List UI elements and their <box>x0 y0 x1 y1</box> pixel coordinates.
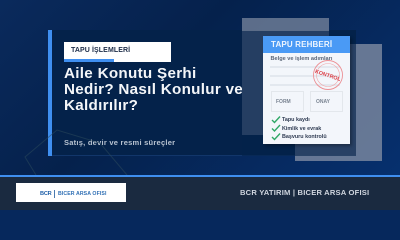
back card left <box>242 18 329 135</box>
title: Aile Konutu Şerhi <box>64 65 197 82</box>
logo name: BICER ARSA OFISI <box>58 190 106 196</box>
check icons <box>272 116 280 140</box>
box: onay: ONAY <box>316 98 330 104</box>
stamp: kontrol <box>313 60 343 90</box>
footer brand text: BCR YATIRIM | BICER ARSA OFISI <box>240 188 369 197</box>
tag text: TAPU İŞLEMLERİ <box>71 47 130 54</box>
card caption: Belge ve işlem adımları <box>270 56 332 62</box>
box: form: FORM <box>276 98 291 104</box>
footer <box>0 175 400 210</box>
check text: Tapu kaydı <box>282 117 310 123</box>
stamp: kontrol: KONTROL <box>314 69 342 83</box>
card: tapu rehberi <box>263 36 350 144</box>
card heading: TAPU REHBERİ <box>271 40 332 49</box>
subtitle: Satış, devir ve resmi süreçler <box>64 138 175 147</box>
check text: Başvuru kontrolü <box>282 134 327 140</box>
check text <box>282 117 327 140</box>
form middle line <box>270 75 340 77</box>
title <box>64 65 243 114</box>
check text: Kimlik ve evrak <box>282 126 321 132</box>
accent bar <box>48 30 52 156</box>
title: Nedir? Nasıl Konulur ve <box>64 81 243 98</box>
box: form <box>271 91 304 112</box>
logo name <box>54 190 106 198</box>
tag underline <box>64 59 114 62</box>
tag: category <box>64 42 171 62</box>
logo box <box>16 182 126 202</box>
form lines <box>270 66 340 86</box>
background <box>0 0 400 175</box>
panel: headline <box>48 30 356 156</box>
box: onay <box>310 91 343 112</box>
checklist <box>272 116 327 140</box>
dark overlap <box>242 31 356 156</box>
card header <box>263 36 350 53</box>
title: Kaldırılır? <box>64 97 138 114</box>
back card right <box>295 44 382 161</box>
logo mark: BCR <box>40 190 52 196</box>
